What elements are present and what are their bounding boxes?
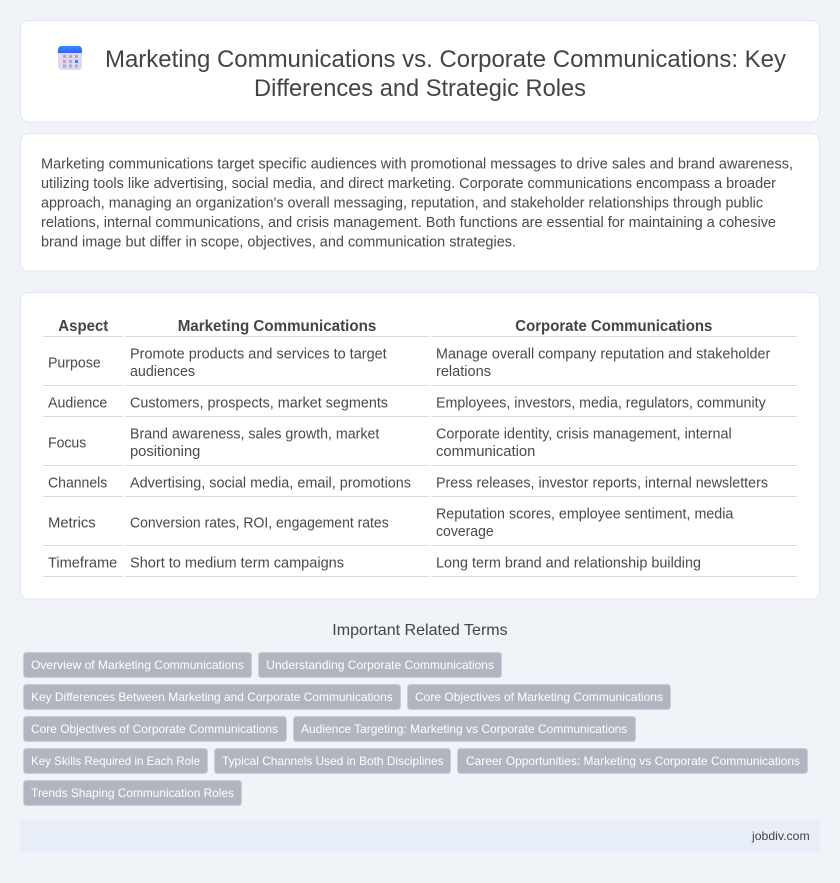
row: metrics (43, 506, 797, 546)
summary text (41, 156, 793, 250)
title: Marketing Communications vs. Corporate Communications: Key (105, 46, 786, 73)
summary text: relations, internal communications, and crisis management. Both functions are essential for maintaining a cohesive (41, 215, 776, 231)
row: metrics: Reputation scores, employee sentiment, media (436, 506, 733, 522)
tag: audience targeting (294, 716, 636, 742)
row: purpose: Promote products and services to target (130, 346, 387, 362)
row: timeframe (43, 555, 797, 577)
panel: summary (20, 134, 820, 271)
tag: key skills: Key Skills Required in Each Role (31, 754, 200, 768)
tag: overview (24, 652, 252, 678)
summary text: brand image but differ in scope, objectives, and communication strategies. (41, 234, 516, 250)
heading: important related terms: Important Related Terms (332, 622, 508, 639)
tag: trends (24, 780, 242, 806)
tag: understanding: Understanding Corporate Communications (266, 658, 494, 672)
tag: key differences: Key Differences Between Marketing and Corporate Communications (31, 690, 393, 704)
row: purpose: Manage overall company reputation and stakeholder (436, 346, 770, 362)
row: focus: Focus (48, 435, 86, 451)
row: audience: Audience (48, 395, 107, 411)
tag: typical channels: Typical Channels Used in Both Disciplines (222, 754, 444, 768)
tag: objectives corporate (24, 716, 286, 742)
tag: audience targeting: Audience Targeting: Marketing vs Corporate Communications (301, 722, 627, 736)
table header row: Marketing Communications (178, 318, 376, 335)
table header row (43, 318, 797, 337)
row: audience: Employees, investors, media, regulators, community (436, 395, 766, 411)
tag: career opportunities (458, 748, 808, 774)
related terms tags (24, 652, 808, 806)
row: metrics: Conversion rates, ROI, engagement rates (130, 515, 389, 531)
row: focus: positioning (130, 444, 200, 460)
row: purpose (43, 346, 797, 386)
table header row: Aspect (58, 318, 109, 335)
summary text: approach, managing an organization's overall messaging, reputation, and stakeholder relationships through public (41, 196, 763, 212)
summary text: utilizing tools like advertising, social media, and direct marketing. Corporate communications encompass a broader (41, 176, 776, 192)
tag: typical channels (214, 748, 450, 774)
row: audience (43, 395, 797, 417)
row: metrics: Metrics (48, 515, 96, 531)
row: channels (43, 475, 797, 497)
tag: career opportunities: Career Opportunities: Marketing vs Corporate Communications (466, 754, 800, 768)
row: metrics: coverage (436, 524, 494, 540)
table header row: Corporate Communications (515, 318, 712, 335)
summary text: Marketing communications target specific audiences with promotional messages to drive sales and brand awareness, (41, 156, 793, 172)
title: Differences and Strategic Roles (254, 75, 586, 102)
row: timeframe: Long term brand and relationship building (436, 555, 701, 571)
row: focus: Corporate identity, crisis management, internal (436, 426, 732, 442)
title (105, 46, 786, 102)
row: channels: Advertising, social media, email, promotions (130, 475, 411, 491)
row: channels: Channels (48, 475, 107, 491)
tag: objectives marketing (408, 684, 670, 710)
tag: understanding (258, 652, 502, 678)
tag: trends: Trends Shaping Communication Roles (31, 786, 234, 800)
panel: header (20, 20, 820, 122)
row: focus: Brand awareness, sales growth, market (130, 426, 379, 442)
tag: key differences (24, 684, 400, 710)
footer: jobdiv.com (751, 829, 810, 843)
icon: calendar (58, 46, 82, 70)
tag: objectives marketing: Core Objectives of Marketing Communications (415, 690, 663, 704)
row: purpose: relations (436, 364, 491, 380)
row: purpose: Purpose (48, 355, 101, 371)
tag: overview: Overview of Marketing Communications (31, 658, 244, 672)
row: timeframe: Timeframe (48, 555, 117, 571)
row: timeframe: Short to medium term campaigns (130, 555, 344, 571)
row: audience: Customers, prospects, market segments (130, 395, 388, 411)
panel: comparison table (20, 292, 820, 599)
tag: objectives corporate: Core Objectives of Corporate Communications (31, 722, 278, 736)
row: focus (43, 426, 797, 466)
footer (20, 819, 820, 853)
row: channels: Press releases, investor reports, internal newsletters (436, 475, 768, 491)
tag: key skills (24, 748, 208, 774)
row: focus: communication (436, 444, 535, 460)
row: purpose: audiences (130, 364, 195, 380)
